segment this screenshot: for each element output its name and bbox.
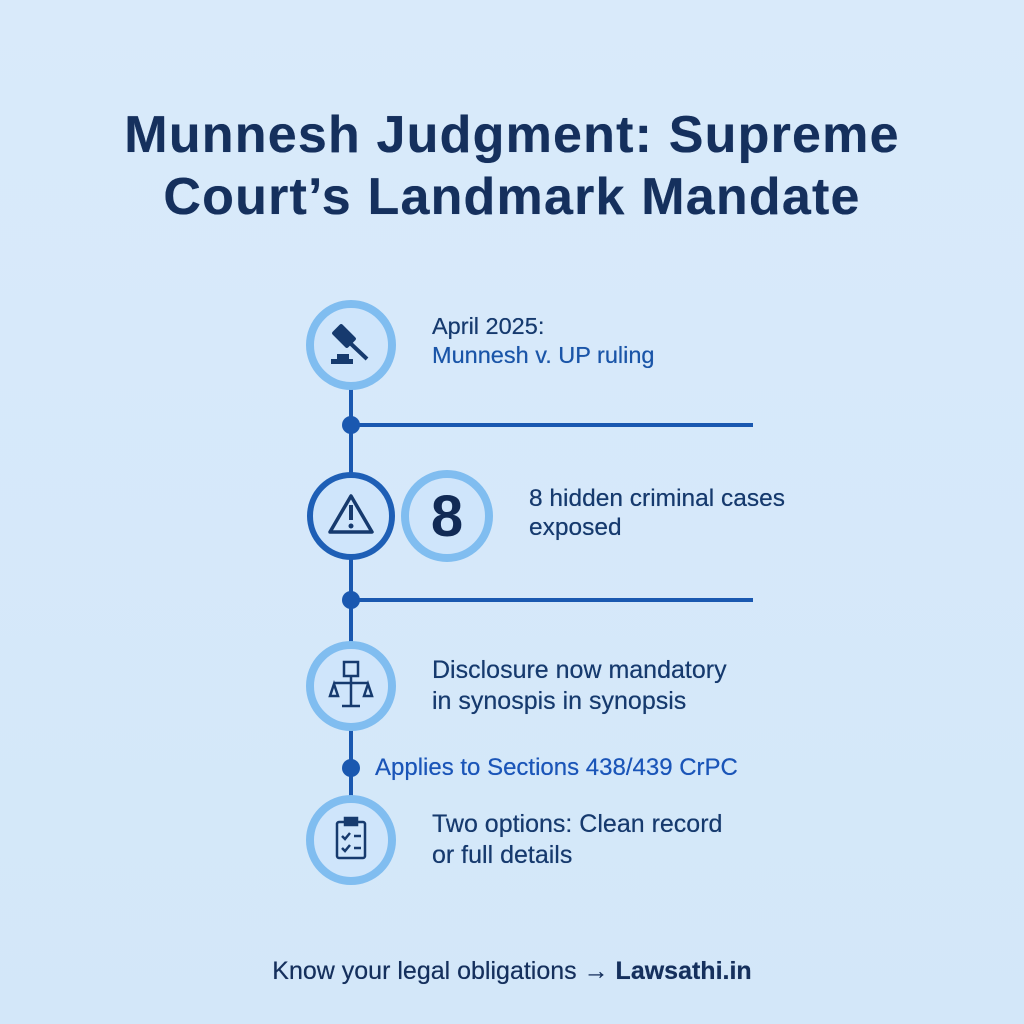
text: april 2025: Munnesh v. UP ruling [432, 342, 654, 368]
text: april 2025: April 2025: [432, 313, 544, 339]
icon: gavel [310, 304, 392, 386]
text: disclosure [432, 656, 727, 715]
text: april 2025 [432, 313, 654, 368]
icon: checklist [310, 799, 392, 881]
text: disclosure: in synospis in synopsis [432, 687, 686, 715]
text: disclosure: Disclosure now mandatory [432, 656, 727, 684]
text: two options [432, 810, 722, 869]
footer: Know your legal obligations → Lawsathi.in [272, 957, 752, 985]
text: 8 hidden cases: 8 hidden criminal cases [529, 485, 785, 512]
text: two options: Two options: Clean record [432, 810, 722, 838]
title: Court’s Landmark Mandate [163, 168, 861, 226]
dots [342, 416, 360, 777]
text: applies to sections: Applies to Sections 438/439 CrPC [375, 754, 738, 781]
text: 8 hidden cases: exposed [529, 514, 622, 541]
text: two options: or full details [432, 841, 572, 869]
icon: scales [310, 645, 392, 727]
title: Munnesh Judgment: Supreme [124, 106, 900, 164]
number 8 badge [405, 474, 489, 558]
title [124, 106, 900, 226]
icon: warning [310, 475, 392, 557]
text: 8 hidden cases [529, 485, 785, 541]
number 8 badge: 8 [431, 484, 463, 549]
